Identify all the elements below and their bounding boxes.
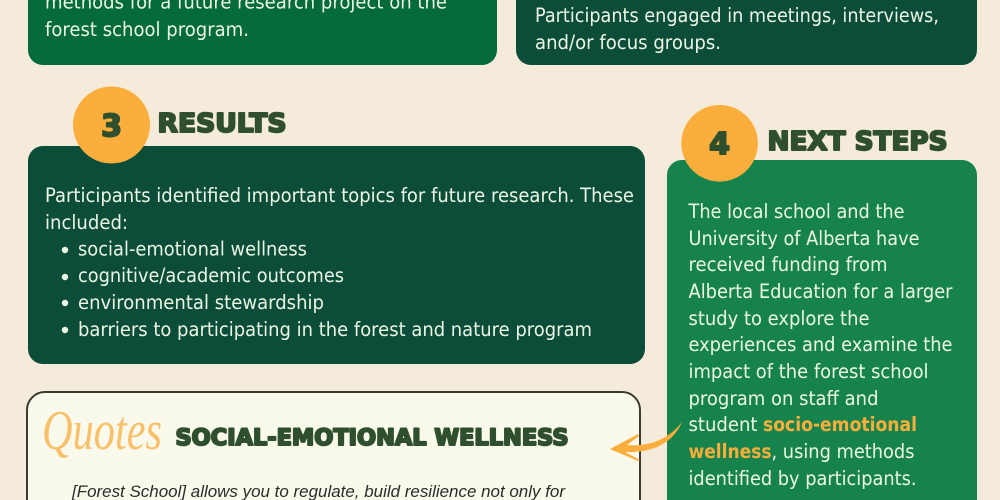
- next steps text: University of Alberta have: [688, 227, 920, 250]
- quotes script title: Quotes: [42, 400, 162, 462]
- panel: next steps: [667, 160, 977, 500]
- next steps text: program on staff and: [688, 387, 878, 410]
- icon: number 3 badge: [73, 86, 150, 164]
- methods text: and/or focus groups.: [535, 31, 721, 54]
- arrow: next steps to quotes: [610, 422, 682, 461]
- next steps text: The local school and the: [688, 200, 904, 223]
- results bullet list: barriers to participating in the forest and nature program: [78, 318, 592, 341]
- next steps text: [688, 200, 953, 490]
- results text: included:: [45, 211, 128, 234]
- next steps text: study to explore the: [688, 307, 870, 330]
- results bullet list: cognitive/academic outcomes: [78, 264, 344, 287]
- next steps text: socio-emotional: [763, 413, 917, 436]
- results bullet list: social-emotional wellness: [78, 238, 307, 260]
- panel: methods: [516, 0, 977, 65]
- next steps text: wellness: [688, 440, 772, 463]
- icon: number 4 badge: [681, 105, 758, 182]
- icon: number 3 badge: 3: [101, 109, 122, 144]
- icon: number 4 badge: 4: [709, 127, 730, 162]
- panel: quotes: [27, 392, 640, 500]
- methods text: [535, 4, 939, 54]
- heading: next steps: NEXT STEPS: [768, 127, 948, 157]
- heading: results: RESULTS: [158, 109, 286, 139]
- aim text: forest school program.: [45, 18, 249, 41]
- next steps text: student: [688, 413, 758, 436]
- aim text: [45, 0, 447, 41]
- next steps text: identified by participants.: [688, 467, 916, 490]
- heading: social-emotional wellness: SOCIAL-EMOTIONAL WELLNESS: [176, 426, 568, 451]
- next steps text: impact of the forest school: [688, 360, 928, 383]
- panel: results: [28, 146, 645, 364]
- methods text: Participants engaged in meetings, interviews,: [535, 4, 939, 27]
- results bullet list: [62, 238, 592, 341]
- next steps text: Alberta Education for a larger: [688, 280, 953, 303]
- next steps text: experiences and examine the: [688, 333, 952, 356]
- results text: Participants identified important topics for future research. These: [45, 184, 634, 207]
- results bullet list: environmental stewardship: [78, 291, 324, 314]
- next steps text: , using methods: [772, 440, 914, 463]
- results text: [45, 184, 634, 234]
- panel: aim: [28, 0, 497, 65]
- next steps text: received funding from: [688, 253, 888, 276]
